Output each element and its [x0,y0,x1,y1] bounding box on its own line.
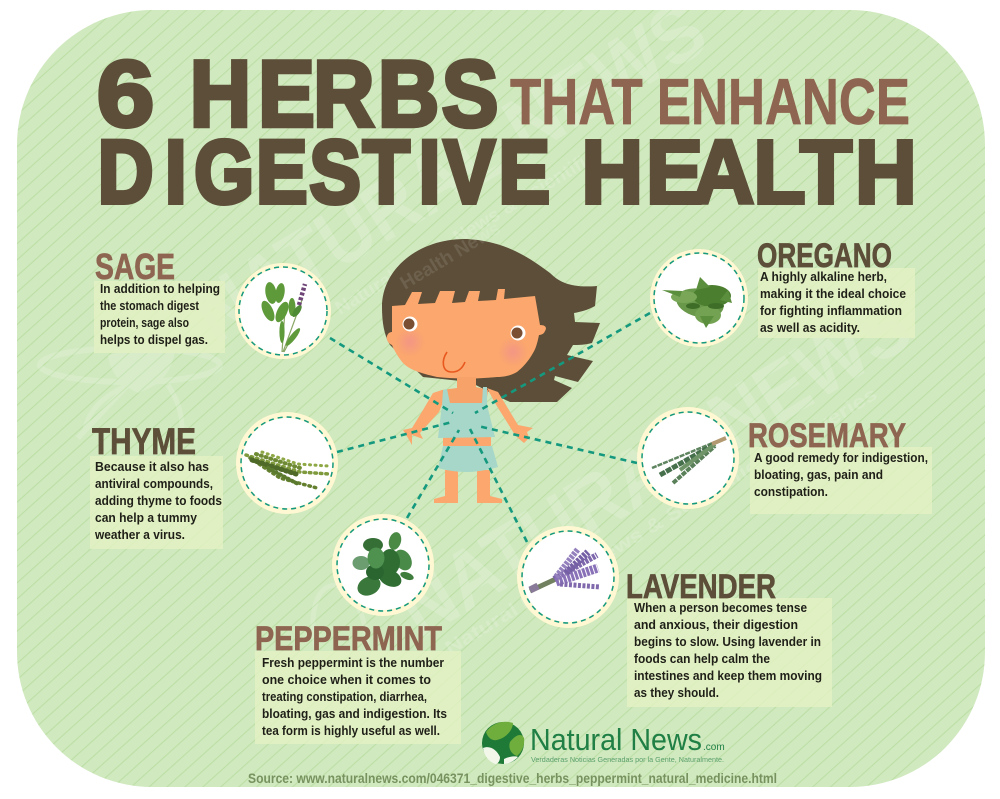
heading: lavender: LAVENDER [626,568,776,606]
panel: oregano [757,237,915,338]
neck and torso [442,377,488,405]
text: sage: protein, sage also [100,316,189,330]
text: thyme: adding thyme to foods [95,494,222,508]
face [387,289,546,378]
panel: sage [94,246,225,353]
logo: Natural News: .com [703,742,725,753]
panel: rosemary [748,417,932,514]
text: sage: the stomach digest [100,299,200,313]
skirt [438,446,498,472]
title: HEALTH [581,122,917,222]
text: oregano [760,270,906,335]
text: peppermint: treating constipation, diarrhea, [262,690,427,704]
legs [434,470,502,503]
text: thyme: can help a tummy [95,511,197,525]
text: oregano: for fighting inflammation [760,304,902,318]
title [97,41,917,222]
watermark [40,0,926,689]
dashed connector lines [330,313,650,542]
character: girl [382,239,600,503]
icon: peppermint leaves [352,531,415,599]
panel: lavender [626,568,832,707]
text: peppermint: Fresh peppermint is the number [262,656,444,670]
heading: oregano: OREGANO [757,237,892,275]
text: peppermint: tea form is highly useful as well. [262,724,440,738]
text: rosemary: bloating, gas, pain and [754,468,883,482]
top [438,387,495,438]
text: thyme: antiviral compounds, [95,477,213,491]
text: rosemary: A good remedy for indigestion, [754,451,928,465]
icon: oregano pile [662,277,732,328]
text: peppermint: one choice when it comes to [262,673,431,687]
herb circle: oregano [650,249,748,347]
herb circle: sage [235,263,331,359]
source line: Source: www.naturalnews.com/046371_digestive_herbs_peppermint_natural_medicine.html [248,770,777,786]
text: lavender: When a person becomes tense [634,601,807,615]
herb circle: thyme [236,412,338,514]
text: lavender: begins to slow. Using lavender in [634,635,821,649]
eyes [402,316,418,332]
title: DIGESTIVE [98,122,550,222]
title: HERBS [190,41,498,146]
text: lavender [634,601,822,700]
logo: Natural News: Verdaderas Noticias Generadas por la Gente, Naturalmente. [531,755,724,764]
text: lavender: foods can help calm the [634,652,770,666]
icon: lavender bunch [530,549,600,591]
text: sage [100,282,220,347]
smile [443,352,465,372]
text: rosemary: constipation. [754,485,828,499]
text: thyme: weather a virus. [94,528,185,542]
herb circle: lavender [517,526,619,628]
text: sage: helps to dispel gas. [100,333,208,347]
icon: thyme sprig [246,452,330,488]
title: 6 [97,41,154,146]
text: thyme: Because it also has [95,460,209,474]
icon: sage sprig [259,281,305,352]
panel: peppermint [255,620,461,744]
text: lavender: as they should. [634,686,719,700]
panel: thyme [90,421,223,549]
hair [382,239,600,402]
heading: thyme: THYME [92,421,196,462]
logo: Natural News [482,722,725,764]
text: sage: In addition to helping [100,282,220,296]
watermark: Natural Health News & Scientific Discoveries [442,384,881,659]
text: rosemary [754,451,928,499]
herb circle: rosemary [637,407,739,509]
icon: rosemary bunch [652,438,726,483]
herb circle: peppermint [332,514,434,616]
text: thyme [94,460,222,542]
cheeks [395,327,425,357]
heading: rosemary: ROSEMARY [748,417,906,455]
text: oregano: A highly alkaline herb, [760,270,887,284]
arms [403,390,444,445]
watermark: NATURAL NEWS [382,279,926,655]
watermark: Natural Health News & Scientific [332,147,600,319]
text: lavender: intestines and keep them moving [634,669,822,683]
heading: sage: SAGE [95,246,175,287]
heading: peppermint: PEPPERMINT [255,620,442,658]
watermark over hair: Health News [397,218,504,294]
text: lavender: and anxious, their digestion [634,618,798,632]
text: peppermint: bloating, gas and indigestion. Its [262,707,447,721]
icon: globe leaf [482,722,524,764]
text: oregano: as well as acidity. [760,321,860,335]
text: peppermint [262,656,447,738]
text: oregano: making it the ideal choice [760,287,906,301]
logo: Natural News: Natural News [530,722,702,757]
